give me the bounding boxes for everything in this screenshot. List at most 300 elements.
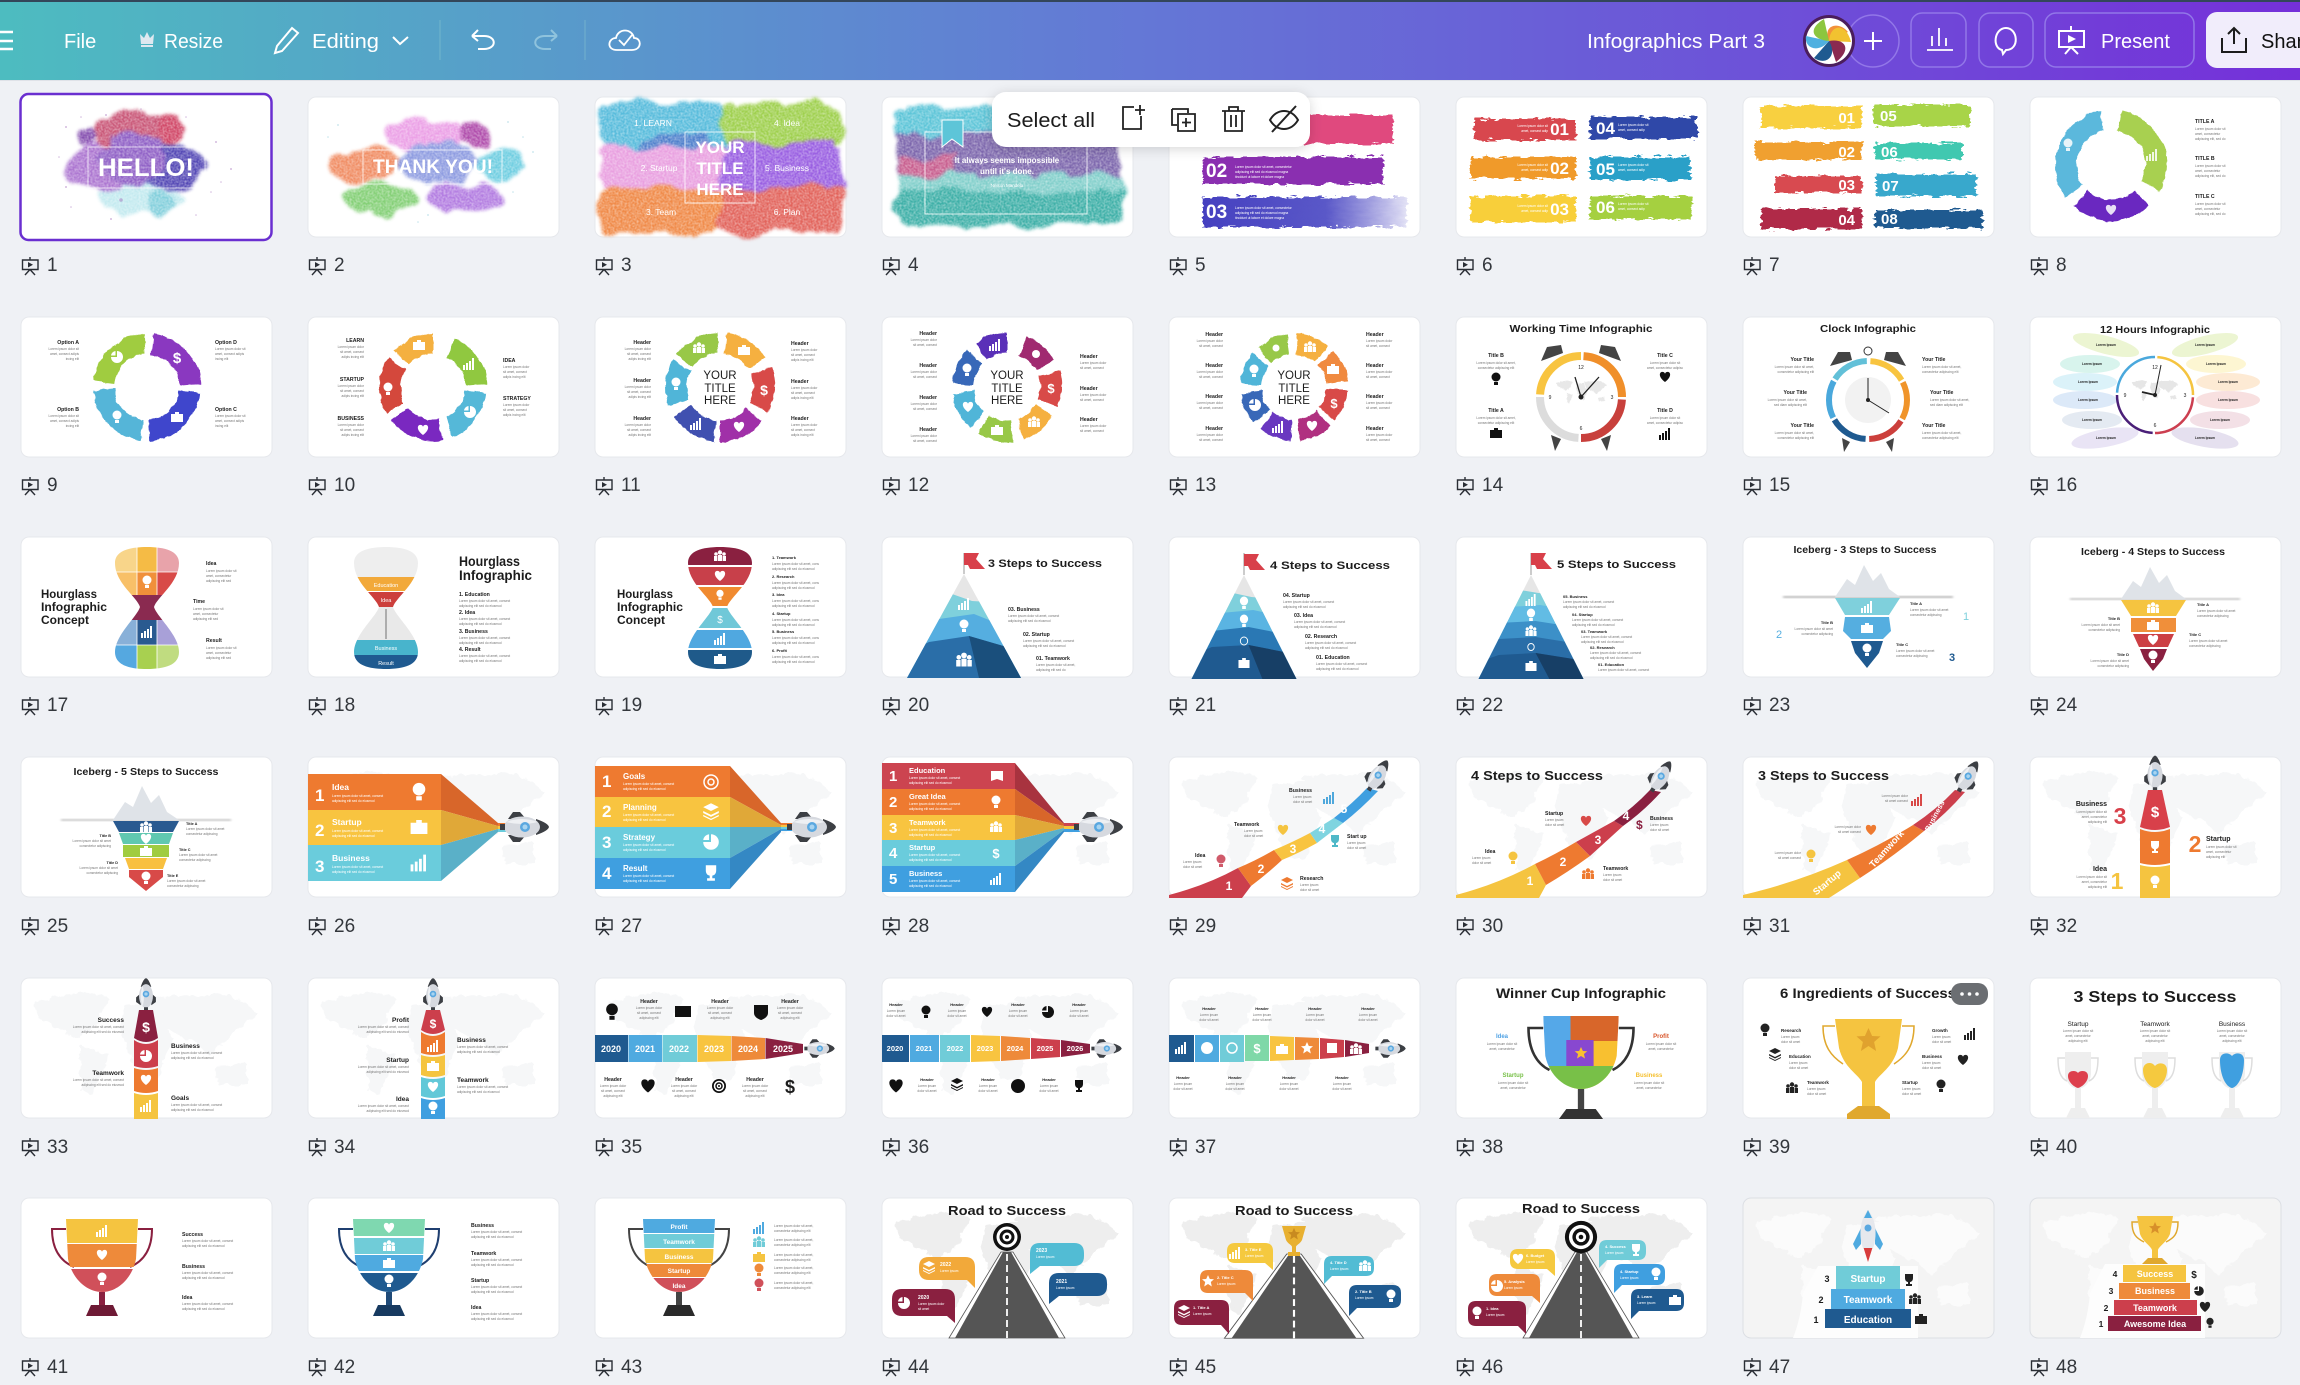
bar text: Lorem ipsum dolor sit	[1518, 204, 1548, 208]
title blocks: Your Title	[1922, 423, 1946, 429]
captions: dolor sit amet	[1347, 846, 1366, 850]
petal captions: Lorem Ipsum	[2078, 380, 2098, 384]
concept title	[617, 587, 683, 627]
brush strokes	[1203, 115, 1407, 227]
slide 29: rising band 5 steps	[1169, 755, 1420, 937]
headers: Lorem ipsum	[1359, 1013, 1378, 1017]
slide number 45	[1170, 1357, 1216, 1378]
captions	[73, 1017, 222, 1112]
speech bubbles: 4. Success	[1605, 1244, 1626, 1249]
topic labels: 4. Idea	[774, 118, 800, 128]
title frame and text	[88, 147, 205, 188]
headers: sit amet, consect	[743, 1089, 767, 1093]
title: Road to Success	[1522, 1201, 1640, 1216]
headers: adipis incing elit	[628, 433, 651, 437]
band words: Teamwork	[1868, 828, 1907, 870]
slide 6: six brush bars	[1456, 97, 1707, 276]
bar numbers: 02	[1838, 144, 1855, 161]
rocket	[1853, 1210, 1883, 1262]
title blocks and icons: amet, consectetur adipisc	[1647, 421, 1683, 425]
slide 43: five layer trophy	[595, 1198, 846, 1378]
bar numbers: 01	[1550, 120, 1569, 139]
captions: Lorem ipsum dolor sit amet	[73, 839, 111, 843]
ring icons: $	[1047, 381, 1055, 396]
petal captions: Lorem Ipsum	[2195, 343, 2215, 347]
band labels: adipiscing elit sed do eiusmod	[623, 848, 666, 852]
captions	[471, 1223, 522, 1321]
captions	[73, 822, 225, 888]
slide number 4: 4	[908, 255, 919, 276]
slide number 47	[1744, 1357, 1790, 1378]
funnel bands	[595, 766, 793, 889]
slide number 46: 46	[1482, 1357, 1503, 1378]
ring diagram	[390, 344, 476, 430]
captions: dolor sit amet	[1244, 834, 1263, 838]
rocket column	[2140, 756, 2170, 898]
bar text: amet, consect adip	[1618, 128, 1645, 132]
captions: Lorem ipsum dolor	[1775, 851, 1802, 855]
slide number 28: 28	[908, 916, 929, 937]
captions: Lorem ipsum dolor sit	[1498, 1081, 1528, 1085]
band labels: adipiscing elit sed do eiusmod	[332, 799, 375, 803]
captions: Lorem ipsum dolor sit amet, consect	[457, 1085, 508, 1089]
title: Iceberg - 5 Steps to Success	[74, 766, 219, 778]
slide number 37	[1170, 1137, 1216, 1158]
numbered list: adipiscing elit sed do eiusmod	[459, 622, 502, 626]
slide number 40: 40	[2056, 1137, 2077, 1158]
title and text blocks: Lorem ipsum dolor sit	[2195, 127, 2226, 131]
rocket	[1074, 812, 1123, 842]
step captions: adipiscing elit sed do eiusmod	[1023, 644, 1066, 648]
headers: Lorem ipsum dolor	[1366, 401, 1393, 405]
option labels: Lorem ipsum dolor sit	[49, 347, 79, 351]
numbered list: 3. Business	[459, 629, 488, 635]
headers: sit amet, consect	[1366, 375, 1390, 379]
rocket column: $	[430, 1017, 437, 1031]
headers: Lorem ipsum dolor	[1080, 393, 1107, 397]
headers: sit amet, consect	[1366, 438, 1390, 442]
centre title: HERE	[1278, 395, 1310, 407]
column labels: Business	[2219, 1021, 2246, 1028]
captions and icons	[1760, 1024, 1975, 1096]
numbered list: 6. Profit	[772, 648, 788, 653]
captions: amet, consectetur	[1648, 1047, 1675, 1051]
captions: 1	[1963, 611, 1969, 623]
step numbers and icons: 4	[2113, 1269, 2118, 1279]
headers: sit amet, consect	[1080, 429, 1104, 433]
captions: adipiscing elit sed do eiusmod	[471, 1290, 514, 1294]
title blocks and icons: consectetur adipiscing elit	[1478, 366, 1514, 370]
headers: Header	[1205, 426, 1223, 432]
captions: 1	[2111, 868, 2124, 894]
bar text: Lorem ipsum dolor sit	[1618, 163, 1649, 167]
column labels: Startup	[2068, 1021, 2089, 1028]
headers: Header	[1366, 332, 1384, 338]
headers: dolor sit amet	[1199, 1018, 1219, 1022]
captions: Lorem ipsum	[1603, 873, 1622, 877]
band labels: Startup	[909, 843, 936, 852]
captions: Lorem ipsum	[1244, 829, 1263, 833]
headers	[886, 1002, 1089, 1093]
captions: adipiscing elit sed do eiusmod	[366, 1070, 409, 1074]
captions: Lorem ipsum dolor sit amet, consect	[471, 1230, 522, 1234]
headers: Lorem ipsum	[1200, 1013, 1219, 1017]
mountain	[1189, 575, 1299, 679]
stair steps: Startup	[1850, 1274, 1886, 1285]
headers: sit amet, consect	[1199, 375, 1223, 379]
captions: adipiscing elit sed do eiusmod	[366, 1030, 409, 1034]
bar numbers: 06	[1596, 198, 1615, 217]
hourglass	[354, 547, 418, 669]
numbered list: Lorem ipsum dolor sit amet, cons	[772, 636, 819, 640]
step captions: adipiscing elit sed do eiusmod	[1008, 619, 1051, 623]
labels: adipiscing elit sed	[206, 656, 231, 660]
headers: Header	[633, 378, 651, 384]
captions: Lorem ipsum dolor sit amet	[167, 879, 206, 883]
captions: consectetur adipiscing	[2088, 628, 2120, 632]
captions: Lorem ipsum dolor sit amet, consect	[171, 1051, 222, 1055]
band labels: Lorem ipsum dolor sit amet, consect	[909, 853, 960, 857]
headers: Header	[920, 1077, 934, 1082]
captions: Lorem ipsum dolor sit amet	[1896, 649, 1935, 653]
option labels	[49, 340, 246, 428]
timeline band: 2022	[947, 1044, 963, 1053]
title: Working Time Infographic	[1510, 323, 1653, 335]
captions: Lorem ipsum	[1300, 883, 1319, 887]
captions: consectetur adipiscing	[186, 832, 218, 836]
headers: Header	[1080, 386, 1098, 392]
captions: Research	[1300, 876, 1323, 882]
topic labels: 6. Plan	[774, 207, 801, 217]
headers: Lorem ipsum	[1174, 1082, 1193, 1086]
speech bubbles: Lorem ipsum	[1056, 1286, 1075, 1290]
captions: adipiscing elit sed do eiusmod	[471, 1235, 514, 1239]
captions: Lorem ipsum dolor sit amet	[2197, 609, 2236, 613]
step captions: 03. Idea	[1294, 613, 1313, 619]
icon list	[753, 1222, 813, 1291]
headers: Header	[1205, 363, 1223, 369]
step numbers: 3	[1290, 842, 1297, 856]
captions: Business	[471, 1223, 494, 1229]
option labels: incing elit	[66, 357, 79, 361]
speech bubbles: 2023	[1036, 1248, 1047, 1254]
title frame: HERE	[696, 180, 744, 199]
captions: Lorem ipsum	[1650, 823, 1669, 827]
labels: Lorem ipsum dolor sit	[206, 569, 237, 573]
hourglass: Result	[378, 661, 394, 667]
slide number 21: 21	[1195, 695, 1216, 716]
step captions: Lorem ipsum dolor sit amet, consect	[1023, 639, 1074, 643]
column labels: Lorem ipsum dolor sit	[2063, 1029, 2093, 1033]
topic labels: BUSINESS	[337, 416, 365, 422]
captions and icons: Lorem ipsum	[1902, 1087, 1921, 1091]
labels: Lorem ipsum dolor sit	[206, 646, 237, 650]
headers: Lorem ipsum	[1040, 1084, 1059, 1088]
ring diagram	[963, 343, 1051, 431]
captions	[2076, 801, 2237, 894]
band icons	[990, 771, 1003, 885]
captions: adipiscing elit sed do eiusmod	[182, 1307, 225, 1311]
captions: Business	[1636, 1073, 1663, 1079]
captions: consectetur adipiscing	[2197, 614, 2229, 618]
captions and icons: Business	[1922, 1054, 1943, 1059]
trophy: Profit	[671, 1224, 688, 1231]
trophy	[339, 1219, 439, 1316]
captions: Business	[171, 1043, 200, 1050]
captions: adipiscing elit	[2088, 820, 2107, 824]
headers: Header	[1011, 1002, 1025, 1007]
slide number 23: 23	[1769, 695, 1790, 716]
column labels: Lorem ipsum dolor sit	[2140, 1029, 2170, 1033]
step numbers: 4	[1319, 822, 1326, 836]
ring icons: $	[760, 382, 768, 398]
slide number 25	[22, 916, 68, 937]
headers: Lorem ipsum dolor	[777, 1006, 804, 1010]
slide number 36	[884, 1137, 929, 1158]
present button	[2045, 13, 2194, 67]
title: Road to Success	[1235, 1203, 1353, 1218]
title and text blocks: adipiscing elit, sed do	[2195, 174, 2226, 178]
timeline band: 2022	[669, 1044, 689, 1054]
step captions: adipiscing elit sed do eiusmod	[1283, 605, 1326, 609]
speech bubbles: Lorem ipsum	[1504, 1286, 1523, 1290]
slide number 3	[596, 255, 632, 276]
headers: sit amet, consect	[913, 407, 937, 411]
slide number 29: 29	[1195, 916, 1216, 937]
speech bubbles: 5. Analysis	[1504, 1279, 1526, 1284]
numbered list	[772, 555, 819, 664]
bar numbers: 06	[1881, 144, 1898, 161]
slide 30: rising band 4 steps	[1456, 756, 1707, 937]
slide number 34: 34	[334, 1137, 356, 1158]
step numbers: 1	[1226, 879, 1233, 893]
option labels: Option A	[57, 340, 79, 346]
slide number 17: 17	[47, 695, 68, 716]
speech bubbles: Lorem ipsum dolor	[918, 1302, 945, 1306]
captions: Lorem ipsum dolor sit amet, consect	[171, 1103, 222, 1107]
headers: dolor sit amet	[1008, 1014, 1028, 1018]
bar numbers	[1838, 108, 1899, 229]
option labels: Option B	[57, 407, 79, 413]
timeline band: 2026	[1067, 1044, 1083, 1053]
slide 31: rising band 3 steps	[1743, 756, 1994, 937]
slide number 42: 42	[334, 1357, 355, 1378]
captions: 3	[1949, 652, 1955, 664]
world map	[1471, 772, 1691, 872]
speech bubbles: 6. Budget	[1526, 1253, 1545, 1258]
captions: Lorem ipsum dolor sit amet, consect	[457, 1045, 508, 1049]
centre title: TITLE	[991, 383, 1023, 395]
headers: sit amet, consect	[1080, 366, 1104, 370]
white side stairs	[1793, 1266, 1918, 1338]
slide 44: road to success target	[882, 1198, 1133, 1378]
concept title: Hourglass	[41, 587, 97, 601]
headers: Header	[1205, 332, 1223, 338]
band labels: 1	[602, 772, 611, 791]
column labels: amet, consectetur	[2065, 1034, 2092, 1038]
title and text blocks: Lorem ipsum dolor sit	[2195, 202, 2226, 206]
world map	[1184, 772, 1404, 872]
captions: consectetur adipiscing	[167, 884, 199, 888]
slide 25: iceberg 5 steps	[21, 757, 272, 937]
headers: Header	[675, 1077, 693, 1083]
slide number 46	[1458, 1357, 1503, 1378]
world map	[1471, 1213, 1691, 1313]
world map	[1758, 1213, 1978, 1313]
captions: Lorem ipsum	[1293, 795, 1312, 799]
bar text: Lorem ipsum dolor sit	[1618, 202, 1649, 206]
captions	[1183, 788, 1367, 892]
headers: dolor sit amet	[1252, 1018, 1272, 1022]
headers: Lorem ipsum	[1280, 1082, 1299, 1086]
headers: sit amet, consect	[601, 1089, 625, 1093]
slide number 19: 19	[621, 695, 642, 716]
speech bubbles: Lorem ipsum	[1245, 1254, 1264, 1258]
world map	[36, 993, 256, 1093]
labels: amet, consectetur	[206, 574, 232, 578]
column labels: adipiscing elit	[2145, 1039, 2165, 1043]
headers: Lorem ipsum	[1009, 1009, 1028, 1013]
slide 10: five part ring	[308, 317, 559, 496]
slide 18: sand hourglass	[308, 537, 559, 716]
speech bubbles	[1174, 1243, 1401, 1334]
captions: Title B	[99, 834, 111, 838]
step captions: Lorem ipsum dolor sit amet, consect	[1563, 600, 1614, 604]
petal captions: Lorem Ipsum	[2218, 398, 2238, 402]
slide 1: Hello watercolor	[20, 94, 272, 276]
captions and icons: Growth	[1932, 1028, 1948, 1033]
clock: 6	[2154, 423, 2157, 429]
captions: Start up	[1347, 834, 1367, 840]
step numbers: 2	[1258, 862, 1265, 876]
slide number 48: 48	[2056, 1357, 2077, 1378]
labels: Time	[193, 599, 205, 605]
title frame and text: HELLO!	[98, 154, 194, 182]
headers: Lorem ipsum dolor	[1080, 424, 1107, 428]
road	[949, 1252, 1065, 1338]
captions: Startup	[386, 1057, 409, 1064]
target	[1565, 1221, 1597, 1253]
editing menu: Editing	[312, 31, 379, 53]
headers: dolor sit amet	[1358, 1018, 1378, 1022]
bar numbers and text	[1206, 161, 1293, 223]
headers: Lorem ipsum dolor	[1366, 433, 1393, 437]
headers: sit amet, consect	[778, 1011, 802, 1015]
headers: Lorem ipsum	[1226, 1082, 1245, 1086]
captions: Lorem ipsum dolor sit amet	[1910, 608, 1949, 612]
band labels: 3	[602, 833, 611, 852]
band labels: Lorem ipsum dolor sit amet, consect	[623, 843, 674, 847]
title: 12 Hours Infographic	[2100, 324, 2210, 336]
ring icons: $	[173, 350, 182, 367]
slide 34: vertical rocket 5	[308, 978, 559, 1158]
trophy	[1282, 1226, 1306, 1256]
slide number 9	[22, 475, 58, 496]
column labels: amet, consectetur	[2142, 1034, 2169, 1038]
headers: Header	[950, 1002, 964, 1007]
captions: adipiscing elit sed do eiusmod	[171, 1108, 214, 1112]
title: Iceberg - 3 Steps to Success	[1794, 544, 1937, 556]
headers: dolor sit amet	[1279, 1087, 1299, 1091]
rocket	[1359, 755, 1396, 796]
band labels: Lorem ipsum dolor sit amet, consect	[909, 802, 960, 806]
headers: Lorem ipsum dolor	[911, 434, 938, 438]
captions: Lorem ipsum dolor sit	[2077, 875, 2107, 879]
step numbers: 1	[1527, 874, 1534, 888]
headers: Header	[1176, 1075, 1190, 1080]
menu icon	[0, 32, 13, 49]
petal captions: Lorem Ipsum	[2210, 418, 2230, 422]
captions and icons: Lorem ipsum	[1807, 1087, 1826, 1091]
slide 23: iceberg 3 steps	[1743, 537, 1994, 716]
topic labels: Lorem ipsum dolor	[338, 345, 365, 349]
headers: adipis incing elit	[791, 396, 814, 400]
alarm clock	[1829, 347, 1907, 452]
title and text blocks: amet, consectetur	[2195, 132, 2221, 136]
captions: Startup	[2206, 836, 2230, 843]
slide number 2	[310, 255, 345, 276]
captions: consectetur adipiscing	[79, 844, 111, 848]
band labels: adipiscing elit sed do eiusmod	[332, 834, 375, 838]
step numbers	[1226, 802, 1348, 893]
headers: Lorem ipsum dolor	[671, 1084, 698, 1088]
captions: Startup	[471, 1278, 489, 1284]
slide 14: working time clock	[1456, 317, 1707, 496]
option labels: Lorem ipsum dolor sit	[215, 414, 246, 418]
trophy	[2132, 1216, 2178, 1264]
headers: sit amet, consect	[791, 428, 815, 432]
captions: Teamwork	[1603, 866, 1628, 872]
band labels: Lorem ipsum dolor sit amet, consect	[623, 874, 674, 878]
headers: sit amet, consect	[627, 428, 651, 432]
headers: Lorem ipsum dolor	[1197, 401, 1224, 405]
concept title: Concept	[617, 613, 665, 627]
captions: Lorem ipsum dolor sit	[1634, 1081, 1664, 1085]
band labels: Lorem ipsum dolor sit amet, consect	[332, 794, 383, 798]
band labels: Lorem ipsum dolor sit amet, consect	[909, 776, 960, 780]
captions: Lorem ipsum dolor sit amet, consect	[182, 1302, 233, 1306]
slide 47: stairs with rocket	[1743, 1198, 1994, 1378]
timeline band: 2021	[635, 1044, 655, 1054]
option labels: incing elit	[215, 424, 228, 428]
title and text blocks: adipiscing elit, sed do	[2195, 137, 2226, 141]
bar numbers: 05	[1880, 108, 1897, 125]
captions: Idea	[182, 1295, 192, 1301]
speech bubbles: 3. Learn	[1637, 1294, 1653, 1299]
slide number 41: 41	[47, 1357, 68, 1378]
numbered list: 2. Research	[772, 574, 795, 579]
captions: adipiscing elit sed do eiusmod	[457, 1050, 500, 1054]
captions: adipiscing elit sed do eiusmod	[182, 1244, 225, 1248]
numbered list: adipiscing elit sed do eiusmod	[459, 659, 502, 663]
headers: Lorem ipsum	[1253, 1013, 1272, 1017]
trophy	[52, 1219, 152, 1316]
petal captions	[2078, 343, 2238, 440]
road	[1523, 1252, 1639, 1338]
numbered list: adipiscing elit sed do eiusmod	[772, 623, 815, 627]
captions and icons: Lorem ipsum	[1781, 1035, 1800, 1039]
captions: Success	[182, 1232, 203, 1238]
title blocks: Your Title	[1930, 390, 1954, 396]
numbered list: 5. Business	[772, 629, 795, 634]
title blocks: Lorem ipsum dolor sit amet,	[1768, 398, 1807, 402]
bar text: Lorem ipsum dolor sit	[1618, 123, 1649, 127]
step numbers and icons: 2	[1818, 1295, 1824, 1305]
timeline band: 2024	[1007, 1044, 1024, 1053]
slide number 6: 6	[1482, 255, 1493, 276]
captions: Title C	[2189, 632, 2201, 637]
icons	[889, 1006, 1083, 1093]
